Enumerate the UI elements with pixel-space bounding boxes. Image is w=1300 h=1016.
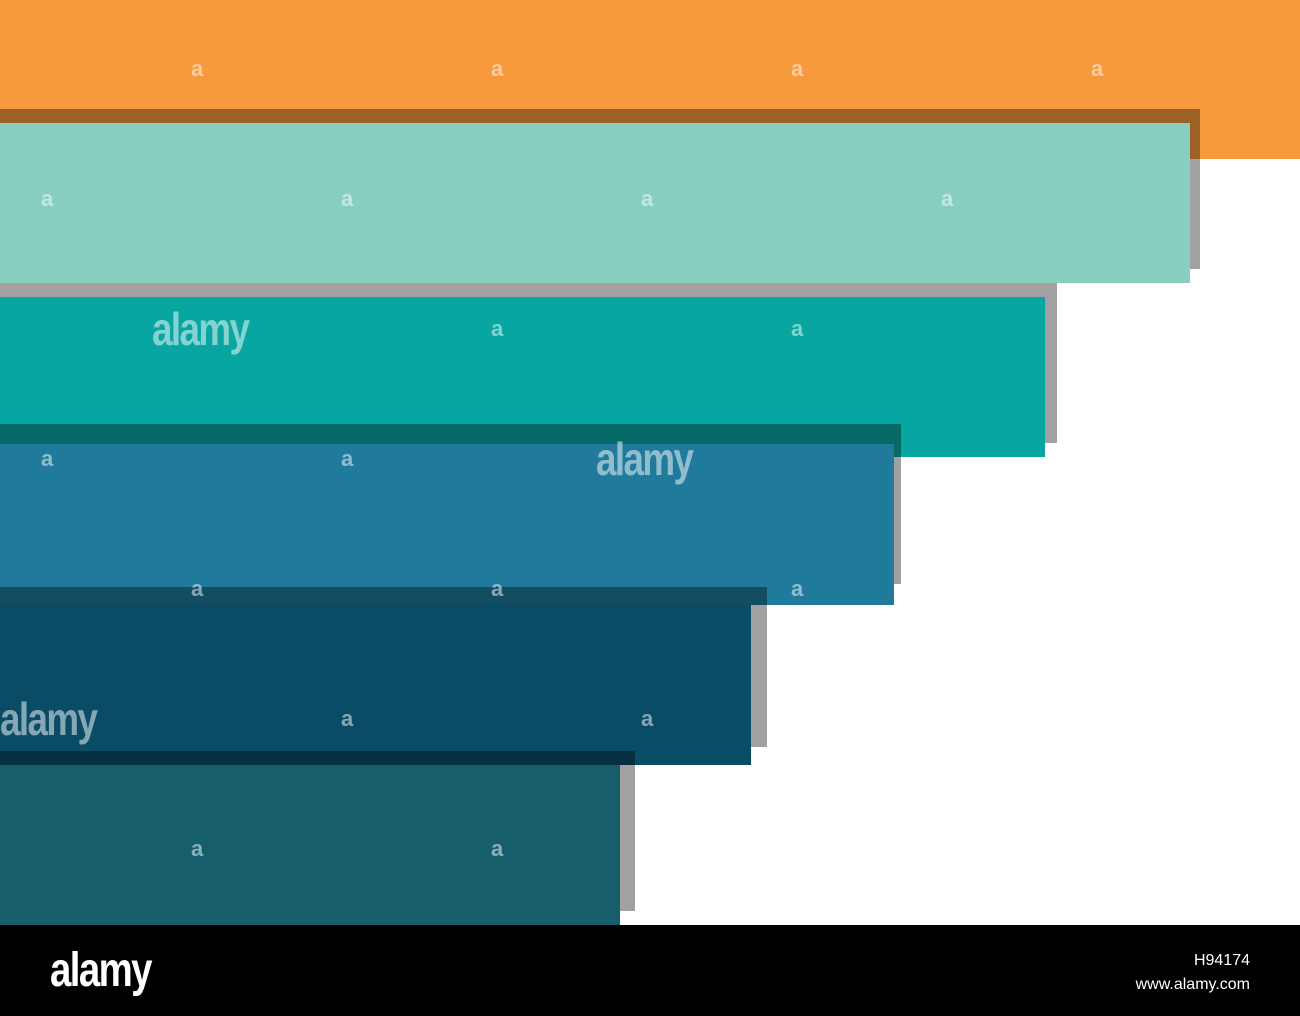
watermarks: a: [791, 576, 803, 601]
watermarks: a: [341, 186, 353, 211]
watermarks: a: [41, 186, 53, 211]
watermarks: a: [1091, 56, 1103, 81]
bar 3: teal: [0, 297, 1045, 457]
watermarks: a: [341, 706, 353, 731]
shadow 3: [0, 283, 1057, 443]
watermarks: a: [341, 446, 353, 471]
watermarks: a: [191, 56, 203, 81]
watermarks: a: [791, 316, 803, 341]
watermarks: a: [491, 836, 503, 861]
bar 2: light teal: [0, 123, 1190, 283]
watermarks: a: [491, 56, 503, 81]
watermarks: a: [641, 706, 653, 731]
watermarks: a: [791, 56, 803, 81]
watermarks: a: [41, 446, 53, 471]
shadow 4: [0, 424, 901, 584]
bar 6: dark teal: [0, 765, 620, 925]
watermarks: alamy: [152, 303, 248, 355]
watermarks: alamy: [596, 433, 692, 485]
shadow 5: [0, 587, 767, 747]
footer id: www.alamy.com: [1136, 976, 1250, 993]
footer id: [1136, 952, 1250, 993]
watermarks: a: [491, 316, 503, 341]
shadow 2: [0, 109, 1200, 269]
watermarks: a: [941, 186, 953, 211]
bar 5: navy: [0, 605, 751, 765]
watermarks: alamy: [0, 693, 96, 745]
footer: [0, 925, 1300, 1016]
watermarks: a: [491, 576, 503, 601]
shadow 6: [0, 751, 635, 911]
watermarks: a: [191, 836, 203, 861]
footer id: H94174: [1194, 952, 1250, 969]
bar 4: blue: [0, 444, 894, 605]
watermarks: a: [641, 186, 653, 211]
watermarks: a: [191, 576, 203, 601]
bar 1: orange: [0, 0, 1300, 159]
footer logo: alamy: [50, 944, 151, 997]
